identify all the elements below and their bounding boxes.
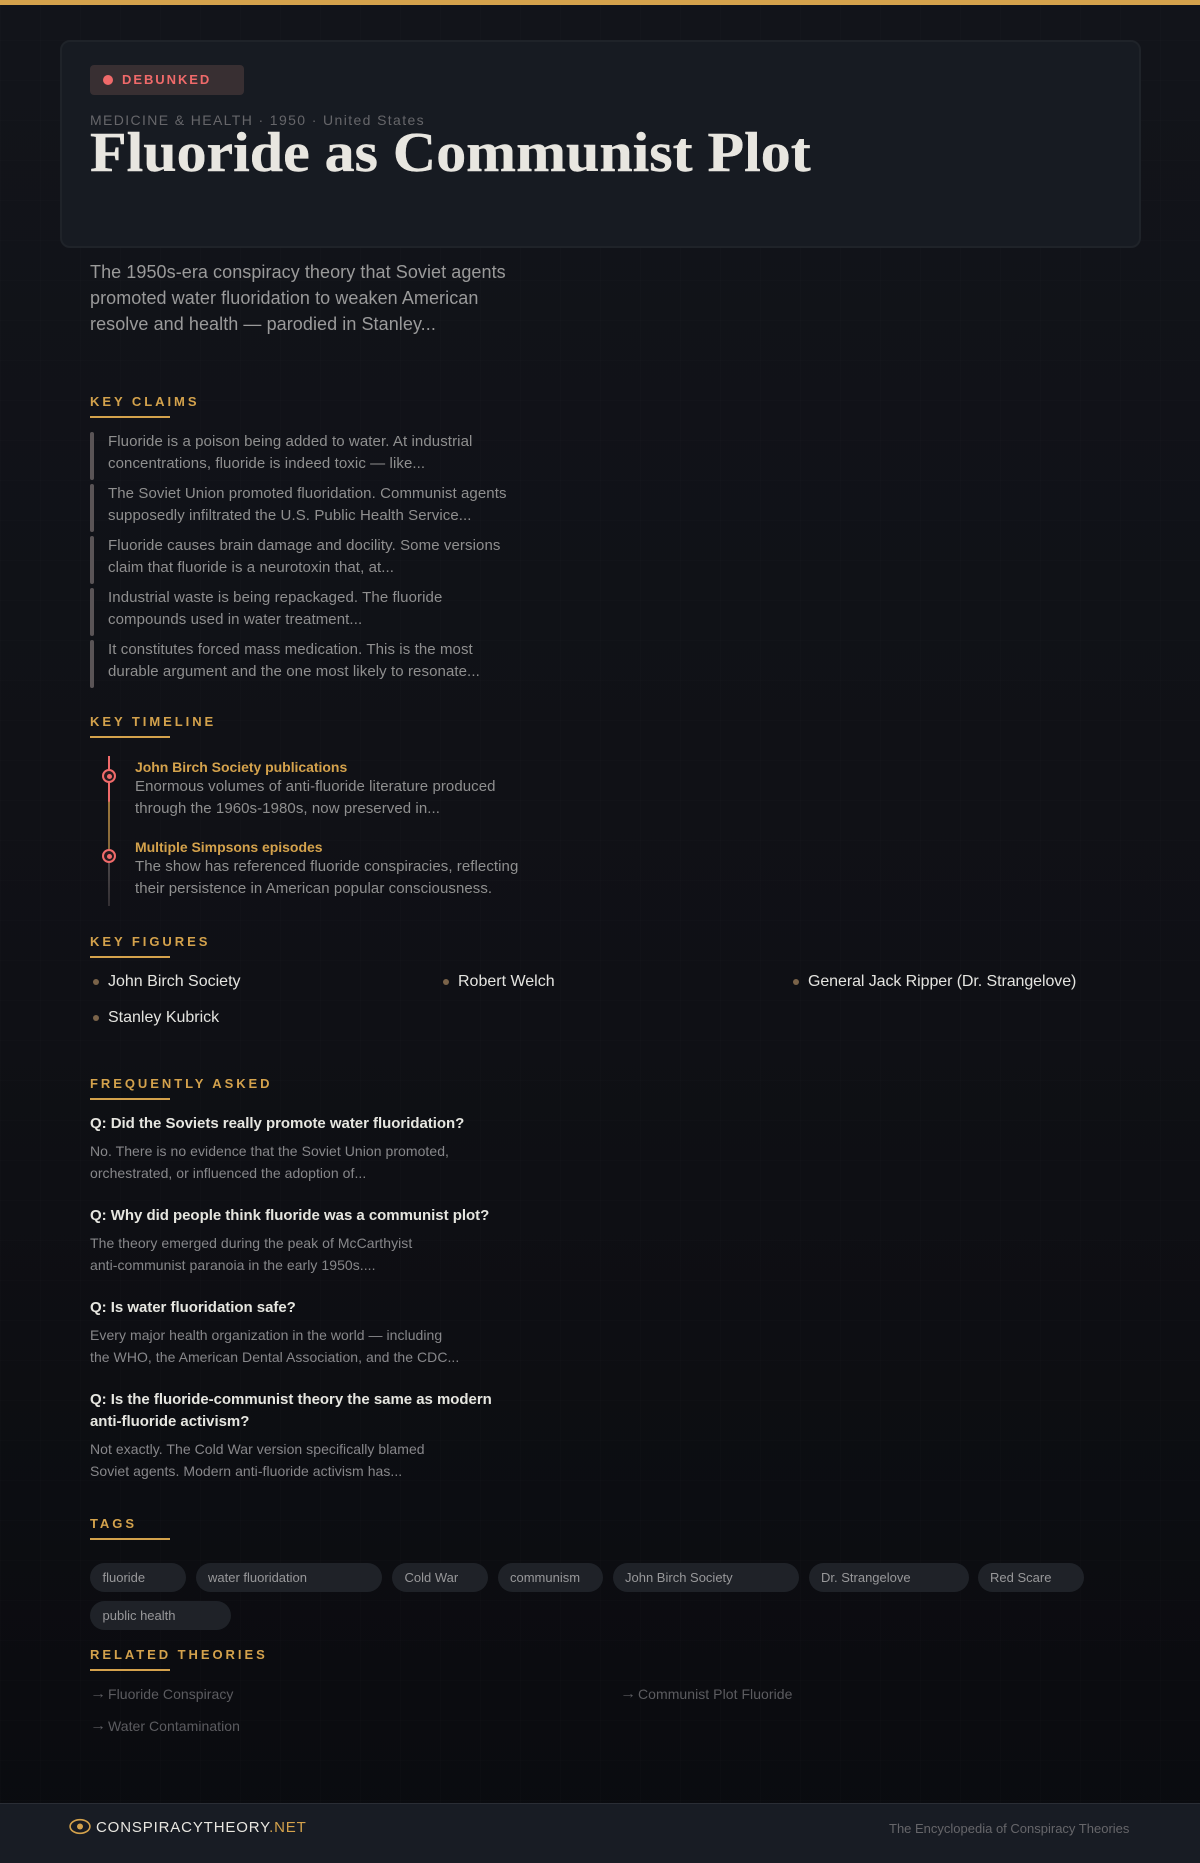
claim 4 — [90, 588, 442, 636]
claim 1: Fluoride is a poison being added to water. At industrial — [108, 433, 472, 450]
event 1 description: Enormous volumes of anti-fluoride literature produced — [135, 778, 496, 795]
tag: fluoride — [102, 1570, 145, 1585]
event 2 title: Multiple Simpsons episodes — [135, 839, 322, 855]
heading: key figures: KEY FIGURES — [90, 934, 210, 949]
claim 2: The Soviet Union promoted fluoridation. Communist agents — [108, 485, 507, 502]
FAQ list — [90, 1115, 492, 1479]
category meta line: MEDICINE & HEALTH · 1950 · United States — [90, 112, 425, 128]
answer 1: No. There is no evidence that the Soviet Union promoted, — [90, 1143, 449, 1159]
heading: key timeline: KEY TIMELINE — [90, 714, 216, 729]
claim 2: supposedly infiltrated the U.S. Public Health Service... — [108, 507, 472, 524]
claim 4: compounds used in water treatment... — [108, 611, 362, 628]
answer 4: Not exactly. The Cold War version specifically blamed — [90, 1441, 425, 1457]
figure: General Jack Ripper: General Jack Ripper (Dr. Strangelove) — [808, 973, 1076, 990]
tag — [90, 1563, 186, 1592]
tag — [978, 1563, 1084, 1592]
answer 3: the WHO, the American Dental Association, and the CDC... — [90, 1349, 459, 1365]
badge label: DEBUNKED — [122, 72, 211, 87]
answer 2: anti-communist paranoia in the early 1950s.... — [90, 1257, 376, 1273]
claim 3: claim that fluoride is a neurotoxin that, at... — [108, 559, 394, 576]
answer 4 — [90, 1441, 425, 1479]
event 2 description: The show has referenced fluoride conspiracies, reflecting — [135, 858, 518, 875]
event 1 title: John Birch Society publications — [135, 759, 347, 775]
related theory link: → — [90, 1717, 106, 1733]
answer 2 — [90, 1235, 412, 1273]
event 2 description: their persistence in American popular consciousness. — [135, 880, 492, 897]
panel: hero header card — [60, 40, 1141, 248]
tag: water fluoridation — [208, 1570, 307, 1585]
claim 4: Industrial waste is being repackaged. The fluoride — [108, 589, 442, 606]
answer 1 — [90, 1143, 449, 1181]
claim 5: durable argument and the one most likely to resonate... — [108, 663, 480, 680]
related theory link: Water Contamination — [108, 1718, 240, 1734]
claim 3 — [90, 536, 500, 584]
question 2: Q: Why did people think fluoride was a communist plot? — [90, 1207, 489, 1224]
tag — [612, 1563, 799, 1592]
tag: communism — [510, 1570, 580, 1585]
tag: John Birch Society — [625, 1570, 733, 1585]
answer 2: The theory emerged during the peak of McCarthyist — [90, 1235, 412, 1251]
tag — [196, 1563, 382, 1592]
question 1: Q: Did the Soviets really promote water fluoridation? — [90, 1115, 464, 1132]
related theory link: → — [90, 1685, 106, 1701]
heading: tags: TAGS — [90, 1516, 137, 1531]
intro text — [90, 262, 506, 334]
answer 1: orchestrated, or influenced the adoption of... — [90, 1165, 366, 1181]
claim 5: It constitutes forced mass medication. This is the most — [108, 641, 473, 658]
heading: key claims: KEY CLAIMS — [90, 394, 199, 409]
figure: Robert Welch: Robert Welch — [458, 973, 555, 990]
question 4 — [90, 1391, 492, 1430]
claim 1 — [90, 432, 472, 480]
intro text: resolve and health — parodied in Stanley... — [90, 314, 436, 334]
heading: related theories: RELATED THEORIES — [90, 1647, 268, 1662]
timeline — [102, 756, 518, 906]
figures list — [93, 973, 1076, 1026]
claim 2 — [90, 484, 507, 532]
heading: frequently asked: FREQUENTLY ASKED — [90, 1076, 273, 1091]
answer 3 — [90, 1327, 459, 1365]
tag — [90, 1601, 231, 1630]
top accent bar — [0, 0, 1200, 5]
title: Fluoride as Communist Plot — [90, 122, 811, 184]
figure: Stanley Kubrick: Stanley Kubrick — [108, 1009, 219, 1026]
tag: Red Scare — [990, 1570, 1051, 1585]
claim 3: Fluoride causes brain damage and docility. Some versions — [108, 537, 500, 554]
related theory link: → — [620, 1685, 636, 1701]
answer 4: Soviet agents. Modern anti-fluoride activism has... — [90, 1463, 402, 1479]
timeline marker 1 — [102, 769, 116, 783]
timeline line — [108, 756, 110, 906]
logo wordmark: CONSPIRACYTHEORY.NET — [96, 1819, 307, 1836]
question 3: Q: Is water fluoridation safe? — [90, 1299, 296, 1316]
icon: status dot — [103, 75, 113, 85]
intro text: promoted water fluoridation to weaken American — [90, 288, 478, 308]
question 4: anti-fluoride activism? — [90, 1413, 249, 1430]
footer tagline: The Encyclopedia of Conspiracy Theories — [889, 1821, 1129, 1836]
tag — [392, 1563, 488, 1592]
answer 3: Every major health organization in the world — including — [90, 1327, 442, 1343]
event 1 description: through the 1960s-1980s, now preserved in... — [135, 800, 440, 817]
claim 1: concentrations, fluoride is indeed toxic — like... — [108, 455, 425, 472]
tag — [808, 1563, 969, 1592]
tag: public health — [102, 1608, 176, 1623]
badge: debunked — [90, 65, 244, 95]
question 4: Q: Is the fluoride-communist theory the same as modern — [90, 1391, 492, 1408]
related theory link: Fluoride Conspiracy — [108, 1686, 233, 1702]
tag list — [90, 1563, 1084, 1630]
tag: Dr. Strangelove — [821, 1570, 911, 1585]
related theory link: Communist Plot Fluoride — [638, 1686, 792, 1702]
panel: claims list — [90, 432, 507, 688]
event 1 description — [135, 778, 496, 817]
intro text: The 1950s-era conspiracy theory that Soviet agents — [90, 262, 506, 282]
tag — [498, 1563, 603, 1592]
tag: Cold War — [404, 1570, 458, 1585]
icon: eye logo — [69, 1818, 91, 1834]
event 2 description — [135, 858, 518, 897]
footer — [0, 1803, 1200, 1863]
claim 5 — [90, 640, 480, 688]
timeline marker 2 — [102, 849, 116, 863]
figure: John Birch Society: John Birch Society — [108, 973, 241, 990]
